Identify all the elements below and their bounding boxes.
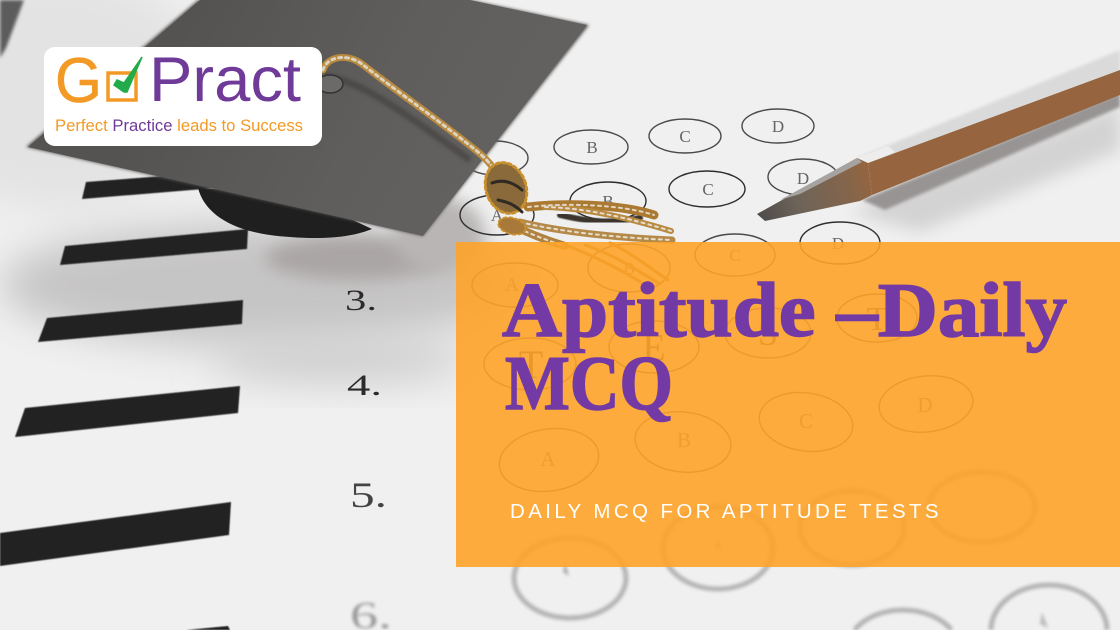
strand shadow	[560, 215, 640, 222]
question numbers	[345, 284, 392, 630]
bubble letters: A	[491, 206, 504, 225]
knot	[478, 157, 534, 219]
panel: orange title panel	[456, 242, 1120, 567]
bubble letters: C	[679, 127, 691, 146]
bubble letters: D	[797, 169, 809, 188]
bubble letters: A	[505, 275, 519, 296]
question numbers: 5.	[350, 475, 387, 515]
logo tagline: Perfect Practice leads to Success	[55, 116, 303, 135]
cord shadow	[324, 76, 470, 160]
bubble letters: T	[519, 342, 543, 387]
bubble letters: B	[602, 192, 614, 211]
bubble letters: B	[586, 138, 598, 157]
bubble letters: B	[677, 428, 691, 452]
strands	[528, 205, 654, 215]
title: Aptitude –Daily	[502, 267, 1067, 353]
bubble letters: A	[540, 447, 556, 471]
cap board	[28, 0, 587, 236]
logo wordmark: G: G	[55, 46, 102, 116]
cap underside	[198, 188, 372, 238]
title: MCQ	[505, 340, 673, 426]
cord	[323, 57, 502, 182]
bubble letters: C	[702, 180, 714, 199]
bubble letters: D	[917, 393, 933, 417]
answer bubbles: sharp upper rows	[460, 109, 976, 498]
bubble letters	[491, 117, 933, 471]
pencil	[757, 50, 1120, 232]
bubble letters: B	[623, 259, 635, 278]
tassel	[323, 57, 672, 288]
logo card	[44, 45, 322, 146]
bubble letters: E	[642, 327, 666, 369]
bubble letters: D	[832, 234, 844, 253]
graduation cap	[26, 0, 589, 238]
blurred lower bubbles	[514, 472, 1107, 630]
bubble letters: D	[772, 117, 784, 136]
logo wordmark: Pract: Pract	[149, 45, 302, 115]
bubble letters: T	[867, 301, 888, 338]
title	[502, 267, 1067, 426]
ruled answer bars	[0, 170, 248, 630]
question numbers: 3.	[345, 284, 377, 317]
bubble letters: C	[799, 409, 813, 433]
question numbers: 4.	[347, 369, 382, 402]
bubble letters: S	[758, 313, 778, 353]
bubble letters: C	[729, 246, 741, 265]
strands under panel	[565, 243, 668, 288]
subtitle: DAILY MCQ FOR APTITUDE TESTS	[510, 500, 942, 523]
icon: checkbox with green tick	[108, 57, 142, 100]
cap board soft edge	[26, 0, 589, 236]
